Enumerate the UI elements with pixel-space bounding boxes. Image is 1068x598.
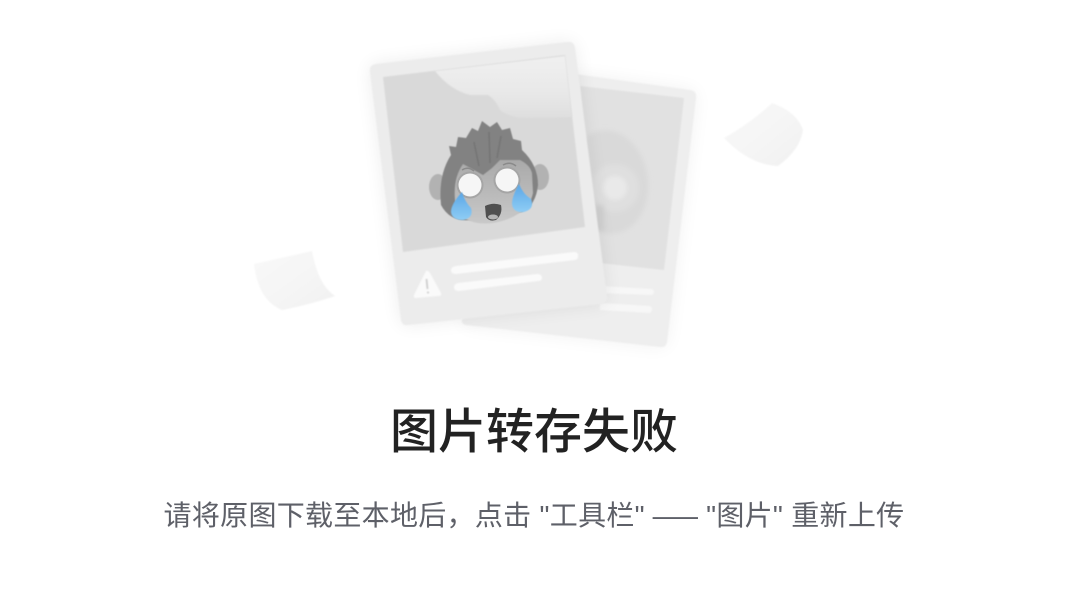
back card image area <box>580 86 684 270</box>
icon: warning triangle <box>414 271 441 298</box>
hair strands <box>474 132 501 166</box>
tear left <box>451 192 472 220</box>
eyes <box>456 172 484 198</box>
monkey face <box>429 121 549 224</box>
mouth <box>485 204 501 221</box>
icon: left torn paper <box>254 251 335 310</box>
front card text lines <box>451 252 578 291</box>
icon: right torn paper <box>724 103 803 166</box>
instruction text: 请将原图下载至本地后，点击 "工具栏" "图片" 重新上传 <box>164 500 904 531</box>
ears <box>429 174 447 200</box>
title: 图片转存失败 <box>390 406 678 459</box>
back card <box>462 74 696 347</box>
front card image area <box>383 55 585 252</box>
tear right <box>512 184 532 212</box>
instruction text: — <box>653 500 698 531</box>
brows <box>462 163 516 171</box>
face <box>455 160 533 224</box>
back card text lines <box>600 286 654 295</box>
front card <box>370 42 607 325</box>
hair <box>440 121 538 220</box>
back card ghost monkey <box>561 125 655 239</box>
torn corner highlight <box>435 56 572 118</box>
